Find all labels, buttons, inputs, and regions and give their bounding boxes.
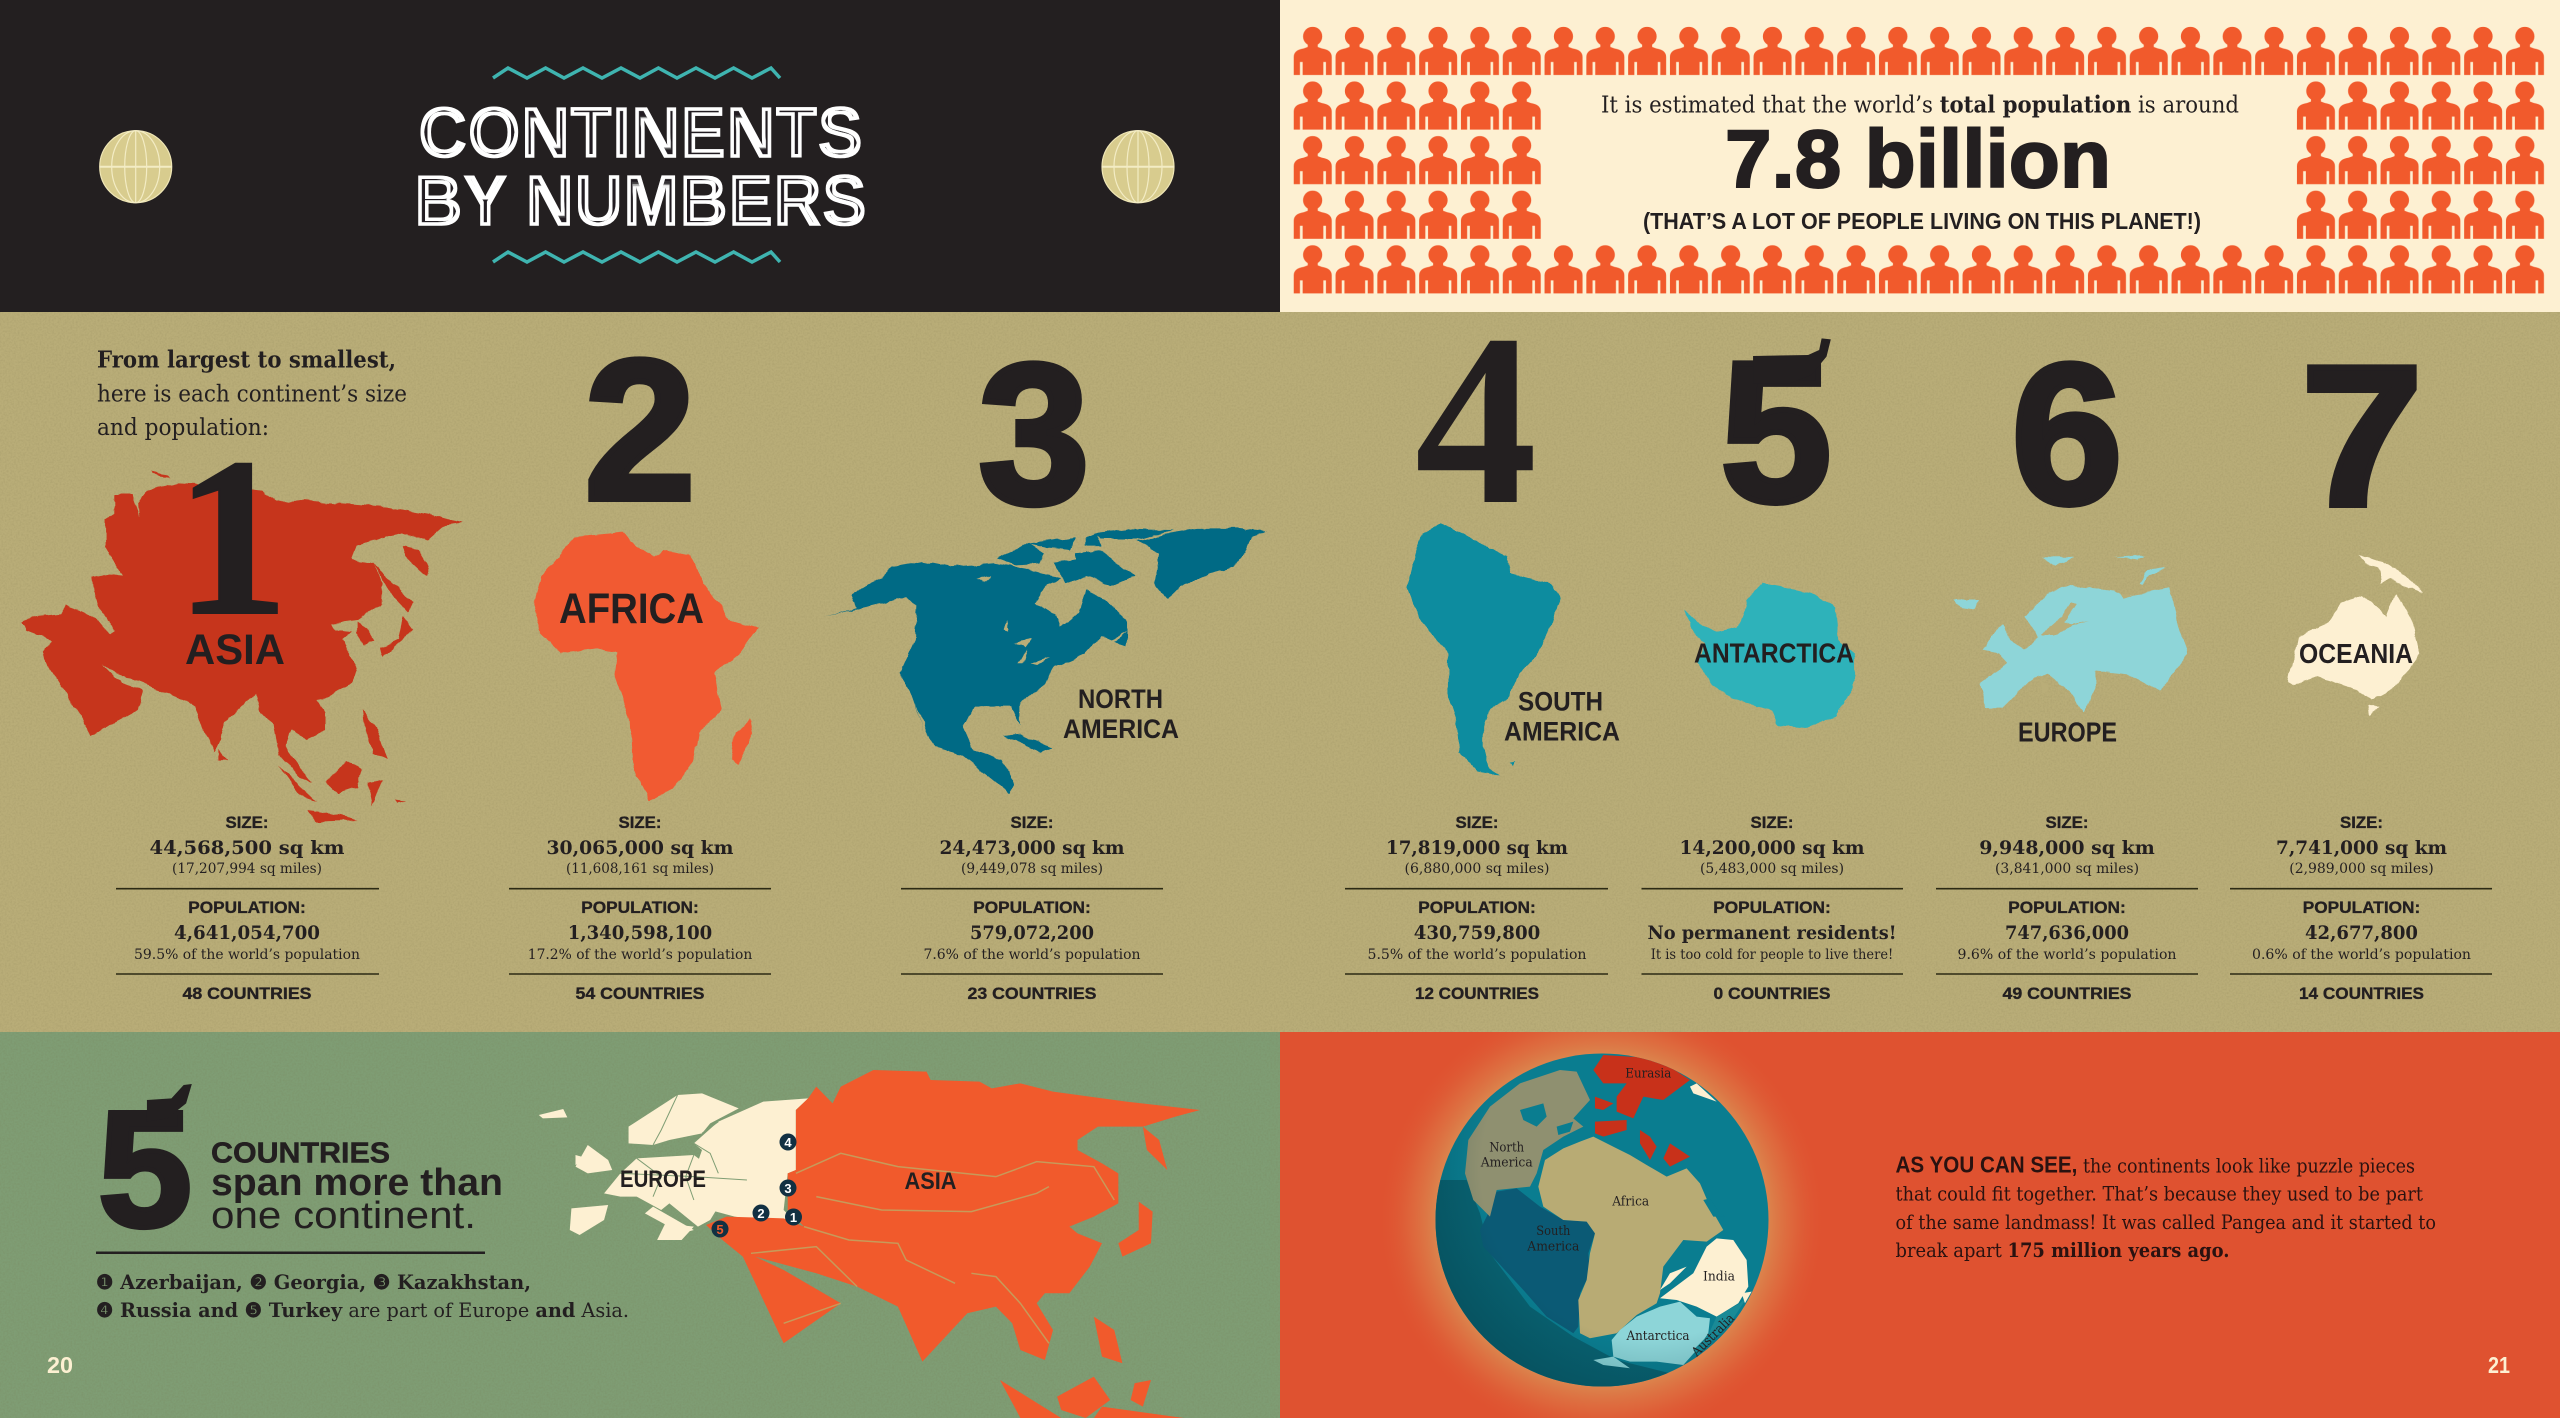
map marker 5 — [712, 1220, 728, 1238]
panel: world population — [1280, 0, 2560, 312]
stats: Europe: 9.6% of the world’s population — [1958, 947, 2177, 963]
icon: left globe — [100, 131, 172, 203]
top zigzag — [493, 68, 780, 78]
map marker 5: 5 — [716, 1222, 724, 1237]
map: South America — [1407, 523, 1560, 775]
panel: Pangea — [1280, 995, 2560, 1418]
stats: Asia: 4,641,054,700 — [174, 923, 320, 944]
globe labels: South — [1536, 1224, 1571, 1239]
numeral 5: 5 — [98, 1077, 192, 1261]
stats: North America: 24,473,000 sq km — [940, 838, 1125, 859]
stats: North America — [901, 813, 1163, 1003]
stats: Antarctica: 0 COUNTRIES — [1714, 984, 1830, 1003]
numeral 3: 3 — [978, 323, 1090, 546]
stats: Oceania: POPULATION: — [2303, 898, 2420, 917]
stats: Africa: 30,065,000 sq km — [546, 838, 734, 859]
stats: South America — [1345, 813, 1608, 1003]
map: Oceania — [2289, 555, 2423, 717]
heading: span more than — [211, 1162, 503, 1204]
label: EUROPE — [2018, 717, 2117, 748]
stats: Europe: SIZE: — [2046, 813, 2088, 832]
map marker 2 — [752, 1204, 770, 1222]
stats: Asia — [116, 813, 379, 1003]
stats: Asia: SIZE: — [226, 813, 268, 832]
icon grid: people — [1292, 24, 2546, 297]
Pangea text block: that could fit together. That’s because they used to be part — [1896, 1183, 2423, 1206]
globe labels: America — [1480, 1156, 1533, 1171]
stats: Antarctica: It is too cold for people to live there! — [1651, 947, 1893, 963]
stats: Antarctica: SIZE: — [1750, 813, 1794, 832]
globe landmasses — [1430, 1054, 1768, 1393]
continent 7: Oceania — [2230, 325, 2492, 1003]
label: AFRICA — [559, 585, 704, 633]
panel: transcontinental countries — [0, 1032, 1280, 1418]
map: Europe — [1954, 555, 2188, 712]
label: SOUTH — [1518, 687, 1603, 717]
stats: Oceania: 14 COUNTRIES — [2299, 984, 2424, 1003]
stats: Europe: (3,841,000 sq miles) — [1995, 861, 2139, 877]
intro text: From largest to smallest, — [97, 347, 396, 374]
map marker 2: 2 — [757, 1206, 765, 1221]
numeral 2: 2 — [584, 319, 696, 542]
label: Asia: ASIA — [904, 1168, 956, 1195]
stats: Antarctica: POPULATION: — [1713, 898, 1831, 917]
population intro text: It is estimated that the world’s total population is around — [1601, 92, 2239, 119]
stats: Africa: 1,340,598,100 — [568, 923, 712, 944]
population figure: 7.8 billion — [1725, 114, 2111, 205]
label: Europe: EUROPE — [620, 1166, 706, 1193]
stats: South America: 430,759,800 — [1414, 923, 1540, 944]
Pangea text block: break apart 175 million years ago. — [1896, 1239, 2230, 1262]
label: NORTH — [1078, 684, 1163, 714]
label: ANTARCTICA — [1694, 638, 1854, 669]
icon: right globe — [1102, 131, 1174, 203]
map: Asia — [20, 472, 462, 822]
map marker 3: 3 — [784, 1181, 792, 1196]
stats: South America: 17,819,000 sq km — [1386, 838, 1568, 859]
heading — [211, 1138, 503, 1237]
stats: Africa: 54 COUNTRIES — [576, 984, 704, 1003]
label — [1063, 684, 1179, 744]
stats: South America: SIZE: — [1456, 813, 1498, 832]
stats: Europe: 9,948,000 sq km — [1979, 838, 2155, 859]
stats: Africa: POPULATION: — [581, 898, 699, 917]
map marker 4: 4 — [784, 1135, 792, 1150]
stats: Antarctica — [1642, 813, 1903, 1003]
stats: Oceania: SIZE: — [2340, 813, 2383, 832]
Pangea text block: of the same landmass! It was called Pangea and it started to — [1896, 1211, 2436, 1234]
globe labels: Africa — [1611, 1195, 1649, 1210]
globe labels: Australia — [1688, 1311, 1738, 1361]
continent 1: Asia — [20, 412, 462, 1003]
label: OCEANIA — [2299, 638, 2413, 669]
map: Antarctica — [1686, 583, 1854, 728]
continent 5: Antarctica — [1642, 321, 1903, 1003]
label — [1504, 687, 1620, 747]
heading: BY NUMBERS — [414, 162, 867, 242]
stats: North America: SIZE: — [1010, 813, 1054, 832]
panel: title banner — [0, 0, 1280, 312]
stats: South America: 12 COUNTRIES — [1415, 984, 1539, 1003]
heading: COUNTRIES — [211, 1138, 390, 1170]
stats: Africa — [509, 813, 771, 1003]
numeral 1: 1 — [176, 412, 288, 662]
map marker 3 — [780, 1180, 796, 1196]
map: Europe and Asia — [539, 1070, 1200, 1418]
label: ASIA — [185, 626, 285, 674]
heading — [414, 94, 867, 242]
bottom zigzag — [493, 252, 780, 262]
legend text: ❶ Azerbaijan, ❷ Georgia, ❸ Kazakhstan, — [96, 1270, 531, 1294]
numeral 4: 4 — [1415, 284, 1537, 555]
numeral 7: 7 — [2301, 325, 2423, 548]
stats: Oceania: 7,741,000 sq km — [2276, 838, 2447, 859]
stats: Antarctica: 14,200,000 sq km — [1680, 838, 1865, 859]
numeral 6: 6 — [2011, 323, 2123, 546]
intro text — [97, 347, 407, 441]
stats: South America: POPULATION: — [1418, 898, 1536, 917]
continent 6: Europe — [1936, 323, 2198, 1003]
globe labels: North — [1489, 1141, 1525, 1156]
globe labels: Antarctica — [1626, 1329, 1690, 1344]
map: North America — [826, 528, 1267, 793]
panel: continents ranking — [0, 284, 2560, 1032]
stats: Antarctica: No permanent residents! — [1648, 923, 1896, 944]
continent 3: North America — [826, 323, 1267, 1003]
map: Europe region — [539, 1093, 808, 1240]
stats: South America: 5.5% of the world’s population — [1368, 947, 1587, 963]
stats: Europe: POPULATION: — [2008, 898, 2126, 917]
globe labels: India — [1703, 1270, 1735, 1285]
intro text: and population: — [97, 415, 269, 441]
globe labels: Eurasia — [1625, 1066, 1672, 1081]
stats: Asia: 48 COUNTRIES — [182, 984, 312, 1003]
stats: North America: (9,449,078 sq miles) — [961, 861, 1103, 877]
legend text: ❹ Russia and ❺ Turkey are part of Europe and Asia. — [96, 1298, 629, 1322]
heading: one continent. — [211, 1195, 476, 1237]
globe halo — [1398, 1032, 1805, 1418]
stats: Asia: POPULATION: — [188, 898, 306, 917]
page number 20: 20 — [47, 1352, 73, 1378]
stats: Oceania — [2230, 813, 2492, 1003]
stats: South America: (6,880,000 sq miles) — [1404, 861, 1550, 877]
numeral 5: 5 — [1720, 321, 1832, 544]
stats: North America: 7.6% of the world’s population — [924, 947, 1141, 963]
stats: Europe: 747,636,000 — [2005, 923, 2129, 944]
stats: Africa: SIZE: — [618, 813, 662, 832]
stats: Africa: 17.2% of the world’s population — [528, 947, 753, 963]
stats: Oceania: (2,989,000 sq miles) — [2289, 861, 2434, 877]
stats: Africa: (11,608,161 sq miles) — [566, 861, 714, 877]
intro text: here is each continent’s size — [97, 382, 407, 408]
population aside: (THAT’S A LOT OF PEOPLE LIVING ON THIS PLANET!) — [1643, 208, 2201, 234]
globe labels: America — [1526, 1240, 1580, 1255]
stats: Asia: 44,568,500 sq km — [150, 838, 345, 859]
stats: Europe: 49 COUNTRIES — [2002, 984, 2132, 1003]
map marker 4 — [780, 1134, 796, 1150]
stats: Oceania: 0.6% of the world’s population — [2252, 947, 2471, 963]
Pangea text block: AS YOU CAN SEE, the continents look like puzzle pieces — [1896, 1152, 2415, 1178]
map marker 1: 1 — [790, 1210, 797, 1225]
stats: Europe — [1936, 813, 2198, 1003]
label: AMERICA — [1063, 714, 1179, 744]
globe — [1430, 1054, 1768, 1393]
stats: Asia: 59.5% of the world’s population — [134, 947, 360, 963]
map: Asia region — [706, 1070, 1200, 1418]
globe labels — [1480, 1066, 1738, 1361]
legend text — [96, 1270, 629, 1322]
stats: Antarctica: (5,483,000 sq miles) — [1700, 861, 1844, 877]
label: AMERICA — [1504, 717, 1620, 747]
continent 4: South America — [1345, 284, 1620, 1003]
continent 2: Africa — [509, 319, 771, 1003]
Pangea text block — [1896, 1152, 2436, 1262]
map marker 1 — [785, 1208, 802, 1226]
page number 21: 21 — [2488, 1352, 2510, 1378]
stats: Oceania: 42,677,800 — [2305, 923, 2418, 944]
map: Africa — [533, 532, 758, 802]
heading: CONTINENTS — [418, 94, 863, 174]
stats: North America: 23 COUNTRIES — [968, 984, 1096, 1003]
stats: North America: POPULATION: — [973, 898, 1091, 917]
stats: North America: 579,072,200 — [970, 923, 1094, 944]
stats: Asia: (17,207,994 sq miles) — [172, 861, 322, 877]
